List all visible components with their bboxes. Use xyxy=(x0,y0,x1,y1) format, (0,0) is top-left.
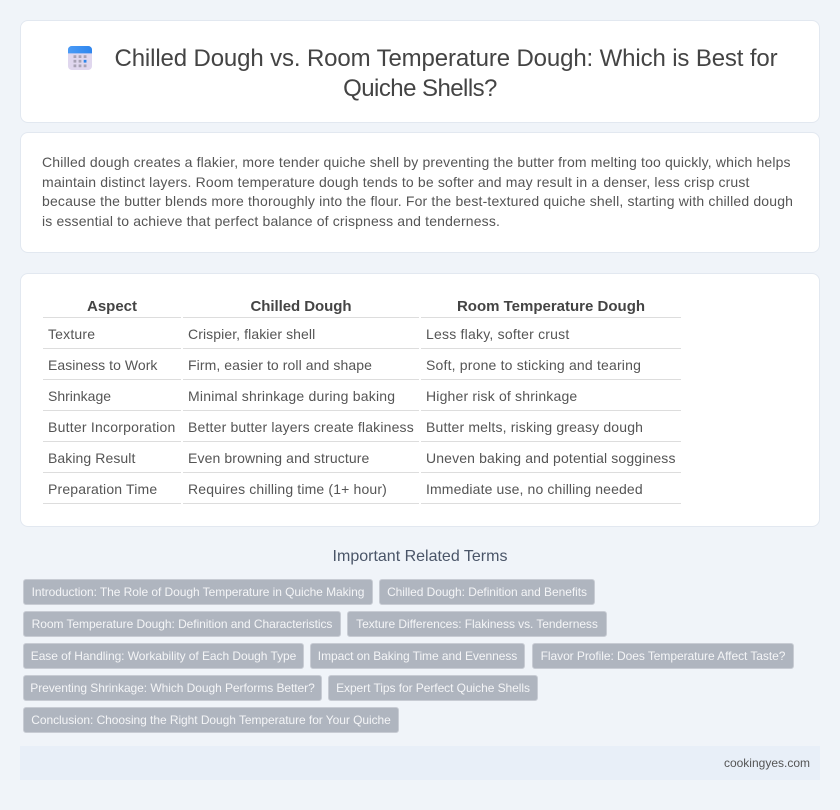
table rows: Texture xyxy=(48,326,95,342)
table rows: Higher risk of shrinkage xyxy=(426,388,577,404)
related term tags: Texture Differences: Flakiness vs. Tenderness xyxy=(356,617,598,631)
table rows xyxy=(43,298,681,504)
related term tags: Flavor Profile: Does Temperature Affect Taste? xyxy=(541,649,785,663)
table rows: Easiness to Work xyxy=(48,357,157,373)
table rows: Butter melts, risking greasy dough xyxy=(426,419,643,435)
related term tags: Room Temperature Dough: Definition and Characteristics xyxy=(32,617,332,631)
table rows: Better butter layers create flakiness xyxy=(188,419,414,435)
related term tags: Preventing Shrinkage: Which Dough Performs Better? xyxy=(30,681,315,695)
table rows: Firm, easier to roll and shape xyxy=(188,357,372,373)
title xyxy=(114,45,778,102)
heading: related terms: Important Related Terms xyxy=(333,548,507,565)
intro text xyxy=(42,154,793,229)
footer bar xyxy=(20,746,820,780)
table rows: Chilled Dough xyxy=(250,298,352,315)
table rows: Immediate use, no chilling needed xyxy=(426,481,643,497)
table rows: Preparation Time xyxy=(48,481,157,497)
table rows: Even browning and structure xyxy=(188,450,369,466)
related term tags: Conclusion: Choosing the Right Dough Temperature for Your Quiche xyxy=(31,713,391,727)
table rows: Requires chilling time (1+ hour) xyxy=(188,481,387,497)
related term tags: Chilled Dough: Definition and Benefits xyxy=(387,585,587,599)
comparison table xyxy=(43,298,681,504)
intro text: is essential to achieve that perfect balance of crispness and tenderness. xyxy=(42,213,500,229)
related term tags: Introduction: The Role of Dough Temperature in Quiche Making xyxy=(32,585,364,599)
related term tags xyxy=(23,579,794,733)
table rows: Crispier, flakier shell xyxy=(188,326,315,342)
panel: header xyxy=(20,20,820,123)
intro text: because the butter blends more thoroughly into the flour. For the best-textured quiche shell, starting with chilled dough xyxy=(42,193,793,209)
panel: comparison table xyxy=(20,273,820,527)
table rows: Aspect xyxy=(87,298,137,315)
intro text: Chilled dough creates a flakier, more tender quiche shell by preventing the butter from melting too quickly, which helps xyxy=(42,154,791,170)
table rows: Uneven baking and potential sogginess xyxy=(426,450,676,466)
table rows: Butter Incorporation xyxy=(48,419,176,435)
table rows: Soft, prone to sticking and tearing xyxy=(426,357,641,373)
related term tags: Impact on Baking Time and Evenness xyxy=(318,649,517,663)
related term tags: Ease of Handling: Workability of Each Dough Type xyxy=(31,649,296,663)
icon: calendar xyxy=(68,46,92,70)
table rows: Minimal shrinkage during baking xyxy=(188,388,395,404)
related term tags: Expert Tips for Perfect Quiche Shells xyxy=(336,681,530,695)
intro text: maintain distinct layers. Room temperature dough tends to be softer and may result in a denser, less crisp crust xyxy=(42,174,750,190)
table rows: Room Temperature Dough xyxy=(457,298,645,315)
table rows: Baking Result xyxy=(48,450,135,466)
panel: introduction xyxy=(20,132,820,253)
table rows: Less flaky, softer crust xyxy=(426,326,570,342)
table rows: Shrinkage xyxy=(48,388,111,404)
title: Quiche Shells? xyxy=(343,75,497,102)
title: Chilled Dough vs. Room Temperature Dough: Which is Best for xyxy=(114,45,778,72)
footer source text: cookingyes.com xyxy=(724,756,810,770)
